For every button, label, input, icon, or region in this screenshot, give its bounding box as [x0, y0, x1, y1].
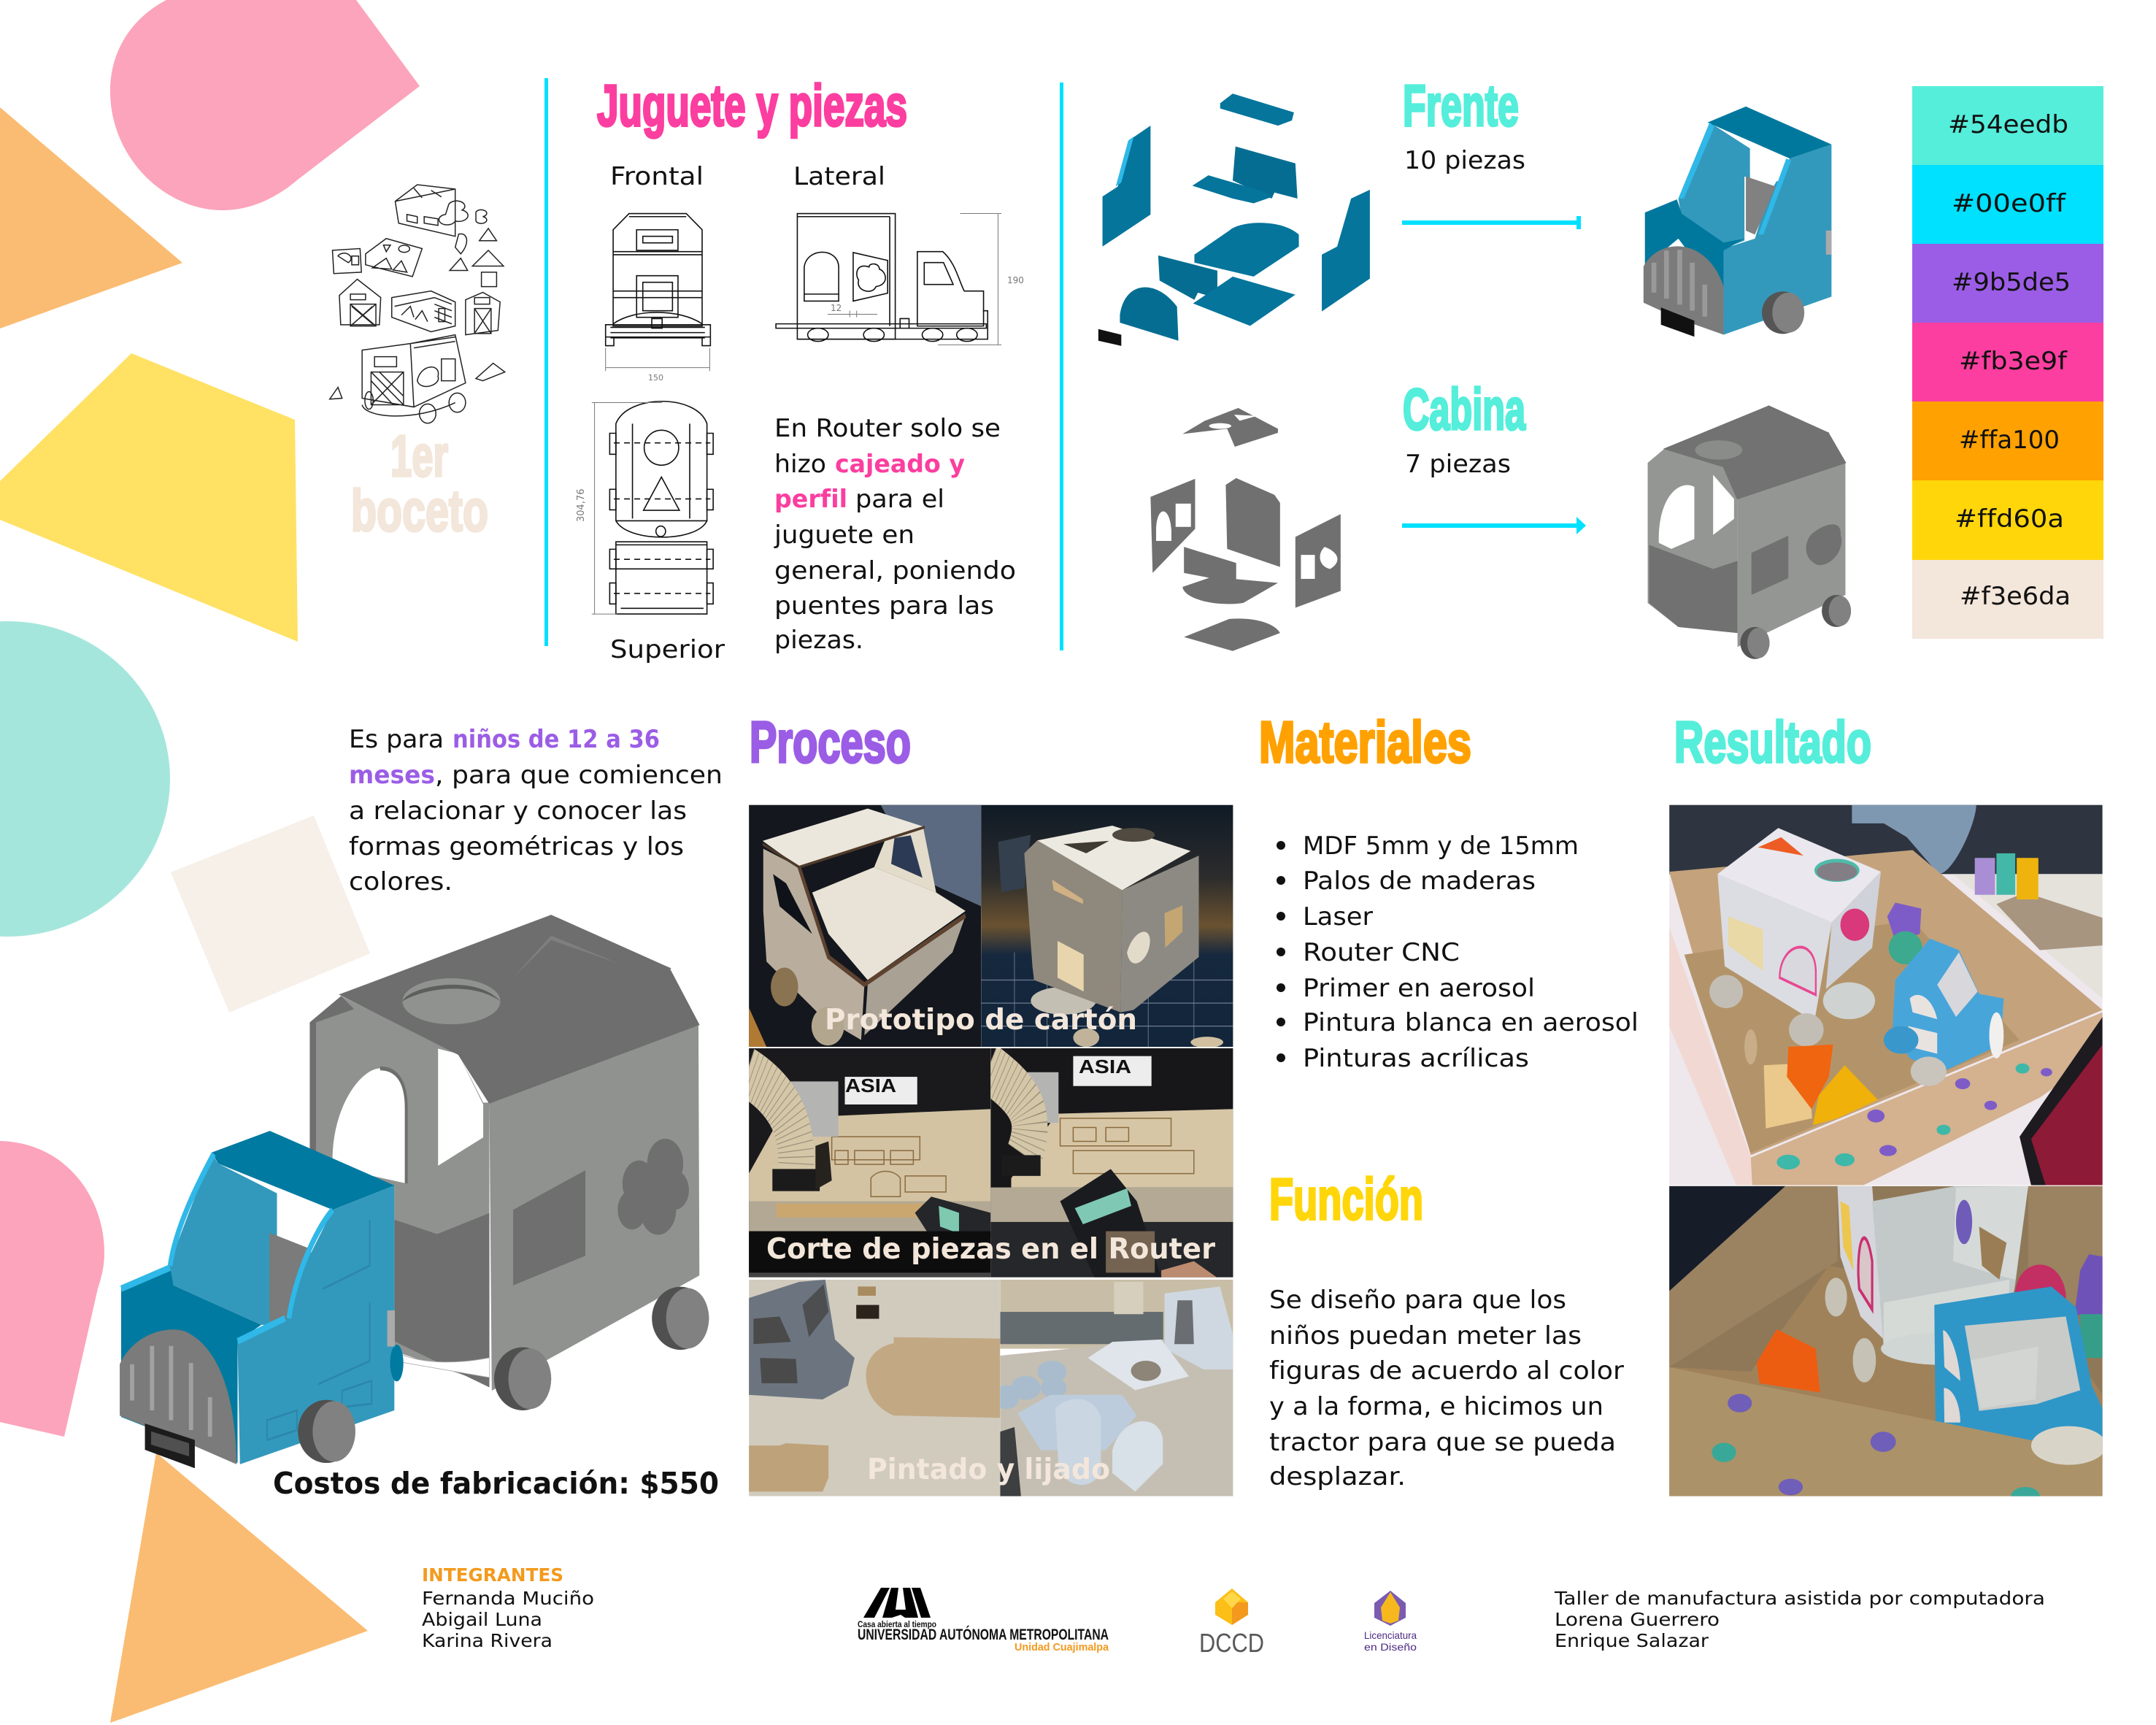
caption: Pintado y lijado: Pintado y lijado	[867, 1453, 1110, 1486]
text: audience paragraph: , para que comiencen	[435, 761, 723, 790]
photo label: ASIA right: ASIA	[1079, 1056, 1131, 1077]
text: audience paragraph: formas geométricas y los	[349, 832, 684, 861]
sketches: first draft drawings	[330, 185, 505, 423]
logo: Licenciatura en Diseño	[1364, 1591, 1417, 1653]
heading: Frente: Frente	[1403, 73, 1519, 138]
text: 10 piezas: 10 piezas	[1404, 146, 1525, 175]
dimension label: 150: 150	[648, 373, 663, 383]
dimension label: 304,76: 304,76	[576, 489, 587, 522]
decorative shape: pink top	[110, 0, 420, 210]
list: materials: Primer en aerosol	[1303, 974, 1535, 1003]
exploded view: cabina pieces	[1150, 408, 1341, 651]
logo: Licenciatura en Diseño: en Diseño	[1364, 1641, 1417, 1653]
list: materials: Router CNC	[1303, 938, 1460, 967]
color palette: #ffd60a	[1955, 504, 2064, 534]
color palette: #9b5de5	[1952, 268, 2071, 297]
heading: 1er boceto: boceto	[351, 478, 488, 543]
photo label: ASIA left: ASIA	[845, 1075, 896, 1096]
course credits: Taller de manufactura asistida por computadora	[1554, 1588, 2045, 1609]
color palette: #54eedb	[1948, 110, 2068, 139]
team credits: Fernanda Muciño	[422, 1588, 594, 1609]
text: function paragraph: tractor para que se pueda	[1269, 1428, 1616, 1457]
text: router paragraph: hizo	[774, 450, 826, 479]
arrow: cabina	[1402, 517, 1586, 534]
divider line 2	[1060, 82, 1063, 650]
list: materials: Pinturas acrílicas	[1303, 1044, 1529, 1073]
heading: Materiales: Materiales	[1259, 710, 1471, 775]
text: function paragraph: y a la forma, e hicimos un	[1269, 1392, 1603, 1421]
logo: DCCD: DCCD	[1199, 1628, 1264, 1658]
text: audience paragraph	[349, 725, 723, 896]
text: function paragraph: desplazar.	[1269, 1462, 1406, 1491]
label: Frontal: Frontal	[610, 162, 704, 191]
color palette: #f3e6da	[1960, 582, 2071, 611]
technical drawing: frontal	[606, 214, 710, 371]
dimension labels: lateral: 12	[831, 303, 842, 313]
color palette	[1912, 86, 2103, 639]
photo: toy in box top view	[1669, 805, 2103, 1185]
logo: UAM: Unidad Cuajimalpa	[1015, 1641, 1109, 1653]
logo: Licenciatura en Diseño: Licenciatura	[1364, 1629, 1417, 1641]
photo: painted pieces	[749, 1280, 1000, 1497]
text: function paragraph	[1269, 1286, 1624, 1491]
text: router paragraph: piezas.	[774, 626, 863, 655]
assembled view: cabina	[1648, 406, 1851, 659]
color palette: #00e0ff	[1952, 189, 2066, 218]
illustration: 3D toy truck	[120, 916, 709, 1468]
heading: Juguete y piezas: Juguete y piezas	[597, 73, 907, 138]
team credits: Karina Rivera	[422, 1630, 553, 1651]
color palette: #fb3e9f	[1959, 347, 2068, 376]
team credits: Abigail Luna	[422, 1609, 542, 1630]
list: materials: MDF 5mm y de 15mm	[1303, 831, 1579, 861]
course credits: Lorena Guerrero	[1555, 1609, 1720, 1630]
text: router paragraph: perfil	[774, 485, 847, 514]
list: materials: Palos de maderas	[1303, 867, 1536, 896]
text: audience paragraph: meses	[349, 761, 435, 790]
exploded view: frente pieces	[1098, 93, 1370, 346]
decorative shape: teal circle	[0, 621, 170, 937]
text: router paragraph: cajeado y	[835, 450, 965, 479]
heading: Cabina: Cabina	[1403, 377, 1525, 442]
list: materials: Laser	[1303, 902, 1373, 931]
logo: UAM: UNIVERSIDAD AUTÓNOMA METROPOLITANA	[858, 1626, 1109, 1643]
heading: Proceso: Proceso	[750, 710, 911, 775]
course credits	[1554, 1588, 2045, 1651]
dimension labels: lateral: 190	[1007, 275, 1024, 285]
color palette: #ffa100	[1959, 426, 2060, 455]
technical drawing: superior	[592, 402, 713, 614]
logo: UAM: Casa abierta al tiempo	[858, 1619, 936, 1629]
heading: Resultado: Resultado	[1674, 710, 1871, 775]
arrow: frente	[1402, 216, 1581, 229]
decorative shape: beige square	[171, 815, 370, 1013]
list: materials: Pintura blanca en aerosol	[1303, 1008, 1639, 1037]
text: function paragraph: Se diseño para que los	[1269, 1286, 1566, 1315]
text: router paragraph: puentes para las	[774, 591, 994, 621]
decorative shape: yellow polygon	[0, 353, 298, 642]
divider line 1	[544, 78, 548, 646]
photo: router cut right	[988, 1048, 1233, 1278]
text: 7 piezas: 7 piezas	[1405, 450, 1511, 479]
course credits: Enrique Salazar	[1555, 1630, 1709, 1651]
text: router paragraph: juguete en	[774, 520, 915, 550]
photo: cardboard truck	[749, 805, 981, 1047]
text: router paragraph: general, poniendo	[774, 556, 1016, 585]
label: Lateral: Lateral	[793, 162, 885, 191]
decorative shape: pink lower	[0, 1141, 104, 1437]
photo: cardboard cabin	[981, 805, 1233, 1048]
photo: sanded pieces	[993, 1280, 1233, 1497]
text: fabrication cost: Costos de fabricación: $550	[273, 1466, 719, 1501]
technical drawing: lateral	[776, 214, 1001, 345]
heading: 1er boceto: 1er	[390, 423, 448, 488]
team credits: INTEGRANTES	[422, 1564, 563, 1586]
photo collage: results	[1669, 805, 2106, 1505]
team credits	[422, 1564, 594, 1651]
text: function paragraph: niños puedan meter las	[1269, 1321, 1582, 1351]
heading: Función: Función	[1269, 1167, 1423, 1232]
text: audience paragraph: Es para	[349, 725, 444, 754]
text: router paragraph	[774, 414, 1016, 655]
label: Superior: Superior	[610, 635, 725, 664]
decorative shape: orange lower triangle	[110, 1453, 368, 1723]
photo: router cut left	[747, 1048, 990, 1278]
caption: Corte de piezas en el Router: Corte de piezas en el Router	[766, 1233, 1216, 1266]
text: audience paragraph: colores.	[349, 867, 453, 896]
heading: 1er boceto	[351, 423, 488, 543]
text: router paragraph: En Router solo se	[774, 414, 1001, 443]
assembled view: frente	[1644, 107, 1831, 337]
photo collage: process	[747, 805, 1233, 1497]
caption: Prototipo de cartón: Prototipo de cartón	[825, 1004, 1137, 1037]
decorative shape: orange triangle	[0, 107, 182, 329]
photo: toy in box close view	[1669, 1186, 2106, 1505]
list: materials	[1277, 831, 1639, 1073]
dimension labels: lateral	[831, 275, 1024, 313]
text: audience paragraph: a relacionar y conocer las	[349, 796, 687, 826]
text: audience paragraph: niños de 12 a 36	[453, 725, 660, 754]
text: function paragraph: figuras de acuerdo al color	[1269, 1356, 1624, 1386]
logo: DCCD	[1199, 1588, 1264, 1658]
logo: UAM	[858, 1588, 1109, 1653]
text: router paragraph: para el	[855, 485, 944, 514]
